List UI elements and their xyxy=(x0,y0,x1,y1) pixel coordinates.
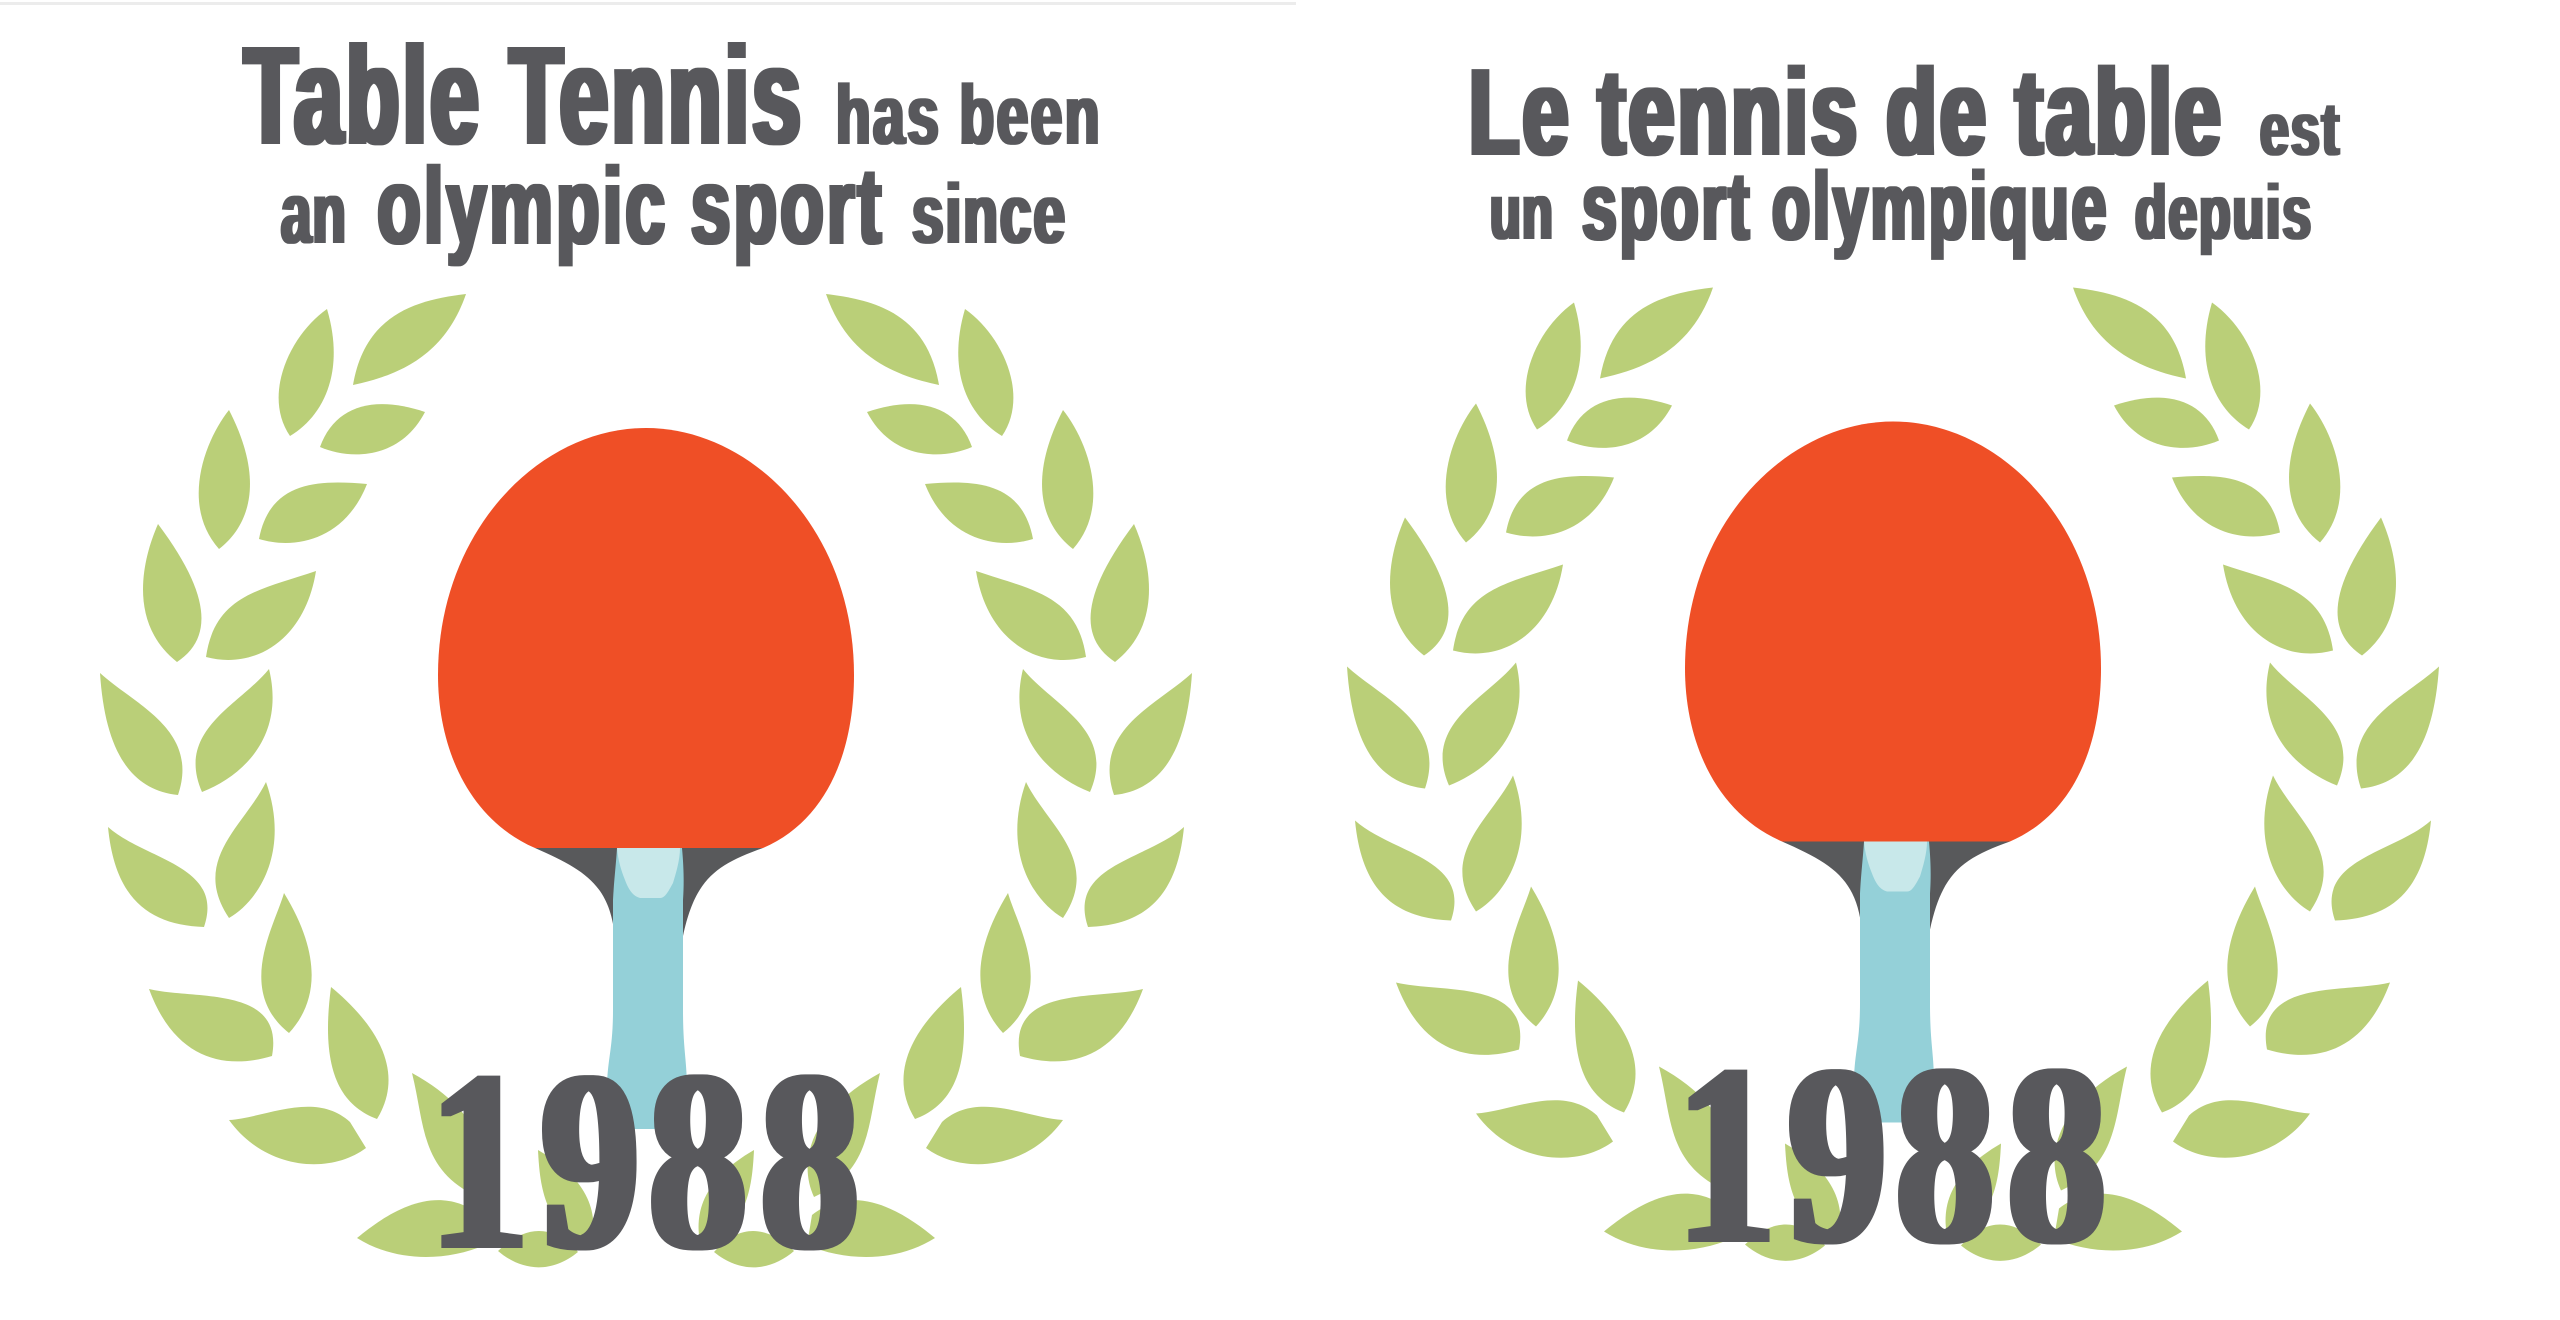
year: 1988: 1988 xyxy=(1677,1011,2106,1297)
top rule xyxy=(0,2,1296,5)
laurel wreath: left branch xyxy=(1347,288,1840,1261)
heading: French: depuis xyxy=(2135,168,2313,256)
laurel wreath: right branch xyxy=(1946,288,2439,1261)
heading: French: est xyxy=(2260,87,2341,172)
heading: French: Le tennis de table xyxy=(1469,44,2224,180)
heading: French: un xyxy=(1490,167,1554,256)
heading: English: has been xyxy=(836,68,1102,163)
laurel wreath: right branch xyxy=(699,294,1192,1267)
heading: English: since xyxy=(912,167,1067,262)
heading: English: Table Tennis xyxy=(244,19,804,173)
heading: French xyxy=(1469,44,2341,260)
panel: French xyxy=(1347,44,2439,1297)
year: 1988: 1988 xyxy=(430,1017,859,1303)
panel: English xyxy=(100,19,1192,1303)
heading: English: olympic sport xyxy=(377,145,884,266)
heading: English xyxy=(244,19,1102,266)
laurel wreath: left branch xyxy=(100,294,593,1267)
heading: French: sport olympique xyxy=(1582,153,2109,260)
icon: table tennis paddle xyxy=(1685,422,2101,1122)
heading: English: an xyxy=(281,163,347,262)
icon: table tennis paddle xyxy=(438,428,854,1129)
